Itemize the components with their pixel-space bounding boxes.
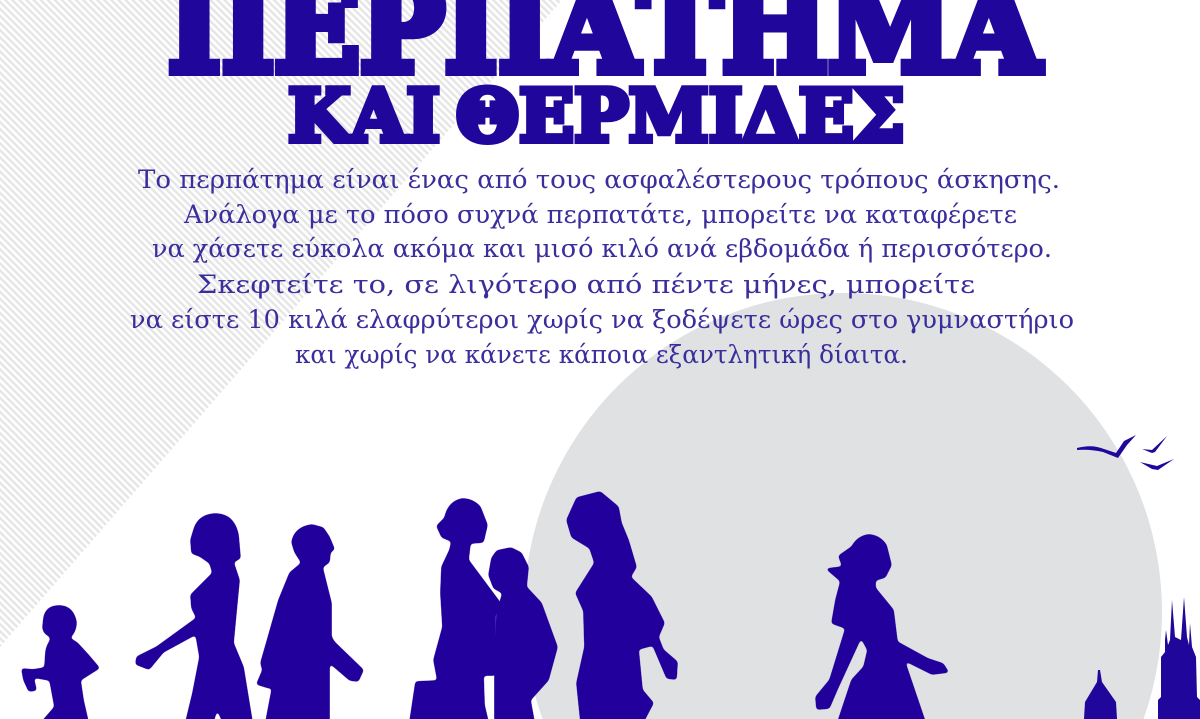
intro text block (130, 165, 1074, 369)
silhouette: woman in dress (816, 535, 948, 719)
title line 2: ΘΕΡΜΙΔΕΣ (456, 73, 905, 158)
intro text block: να είστε 10 κιλά ελαφρύτεροι χωρίς να ξοδέψετε ώρες στο γυμναστήριο (130, 305, 1074, 334)
city skyline (1084, 597, 1200, 719)
silhouette: boy (489, 548, 557, 719)
background: diagonal striped triangle (0, 0, 562, 647)
title (168, 0, 1042, 158)
intro text block: και χωρίς να κάνετε κάποια εξαντλητική δίαιτα. (295, 340, 908, 369)
birds (1077, 435, 1174, 470)
building: domed tower (1084, 670, 1117, 719)
silhouette: walking man (257, 525, 363, 719)
silhouette: woman with bag (410, 499, 500, 719)
bird large (1077, 435, 1136, 458)
title line 2: ΚΑΙ (288, 73, 440, 158)
silhouettes group (22, 492, 948, 719)
grey moon circle (524, 293, 1162, 719)
silhouette: walking woman (136, 514, 252, 719)
intro text block: Ανάλογα με το πόσο συχνά περπατάτε, μπορείτε να καταφέρετε (183, 200, 1017, 229)
intro text block: να χάσετε εύκολα ακόμα και μισό κιλό ανά εβδομάδα ή περισσότερο. (152, 234, 1052, 263)
building: skyscraper with antennas (1158, 597, 1200, 719)
intro text block: Σκεφτείτε το, σε λιγότερο από πέντε μήνες, μπορείτε (197, 270, 975, 299)
silhouette: pregnant woman (567, 492, 677, 719)
bird small lower (1140, 459, 1174, 470)
intro text block: Το περπάτημα είναι ένας από τους ασφαλέστερους τρόπους άσκησης. (138, 165, 1060, 194)
silhouette: running child (22, 606, 99, 719)
bird small upper (1142, 436, 1167, 453)
